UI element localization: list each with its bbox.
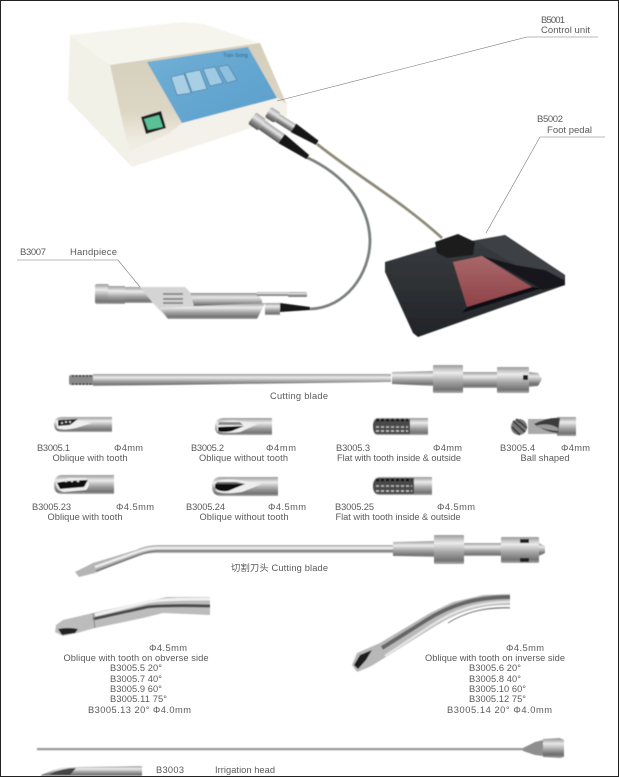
captions inverse [425,643,565,715]
pedal plate [453,256,532,307]
label: foot pedal: Foot pedal [547,125,592,136]
captions row 2 [32,502,475,522]
captions row 2: Φ4.5mm [116,502,154,512]
handpiece [95,284,310,319]
caption: irrigation head: Irrigation head [215,765,275,775]
captions row 1: B3005.3 [336,443,370,453]
captions row 2: Φ4.5mm [268,502,306,512]
leader lines [17,37,605,287]
label: control unit [541,15,590,36]
captions row 1: Oblique without tooth [199,453,288,463]
captions inverse: B3005.6 20° [469,663,521,673]
captions inverse: B3005.8 40° [469,674,521,684]
captions inverse: Φ4.5mm [506,643,544,653]
captions obverse: B3005.5 20° [110,663,162,673]
caption: cutting blade: Cutting blade [270,391,328,401]
caption: irrigation head [156,765,275,775]
tip B3005.3 [373,418,428,435]
captions row 1: Φ4mm [114,443,143,453]
pedal cable block [435,234,475,258]
label: foot pedal: B5002 [537,114,563,125]
captions obverse: B3005.11 75° [110,694,167,704]
tip B3005.4 [511,417,576,436]
captions row 1: Ball shaped [520,453,570,463]
captions row 2: B3005.23 [32,502,71,512]
captions row 2: B3005.24 [186,502,225,512]
tip B3005.24 [212,477,278,496]
tip B3005.2 [215,418,272,435]
captions row 1: Φ4mm [266,443,296,453]
cutting blade curved [75,535,545,577]
cables [306,144,442,309]
captions inverse: Oblique with tooth on inverse side [425,653,565,663]
tip inverse [352,594,510,672]
captions inverse: B3005.10 60° [469,684,526,694]
tip B3005.25 [373,477,432,495]
cutting blade straight [69,365,542,393]
captions row 1: Φ4mm [433,443,462,453]
captions inverse: B3005.12 75° [469,694,526,704]
captions row 1 [37,443,590,463]
caption: irrigation head: B3003 [156,765,184,775]
display panel: Tian Song [223,53,248,59]
captions row 1: Flat with tooth inside & outside [337,453,461,463]
label: control unit: Control unit [541,25,590,36]
captions row 2: Oblique without tooth [200,512,288,522]
tip B3005.23 [54,475,114,494]
label: control unit: B5001 [541,15,565,26]
captions row 2: Oblique with tooth [48,512,122,522]
control unit [68,22,287,167]
captions row 1: B3005.4 [500,443,535,453]
captions row 2: Φ4.5mm [437,502,475,512]
foot pedal [385,234,565,337]
irrigation tip [41,766,142,776]
captions row 1: B3005.2 [191,443,224,453]
tip obverse [55,597,210,636]
captions row 1: Oblique with tooth [52,453,128,463]
captions inverse: B3005.14 20° Φ4.0mm [447,705,552,715]
captions row 1: Φ4mm [561,443,590,453]
display panel [147,47,277,123]
label: handpiece [20,247,117,258]
captions obverse: Oblique with tooth on obverse side [64,653,208,663]
captions obverse: B3005.7 40° [110,674,162,684]
label: handpiece: B3007 [20,247,46,258]
captions obverse: B3005.13 20° Φ4.0mm [88,705,191,715]
captions obverse: B3005.9 60° [110,684,162,694]
irrigation needle [37,738,564,758]
captions obverse [64,643,208,715]
captions row 2: B3005.25 [335,502,374,512]
caption: curved cutting blade: 切割刀头 Cutting blade [231,562,328,573]
captions row 2: Flat with tooth inside & outside [336,512,460,522]
captions obverse: Φ4.5mm [149,643,187,653]
label: handpiece: Handpiece [70,247,117,258]
captions row 1: B3005.1 [37,443,70,453]
connectors [248,107,320,163]
power switch [141,111,166,134]
label: foot pedal [537,114,592,136]
tip B3005.1 [54,417,112,432]
